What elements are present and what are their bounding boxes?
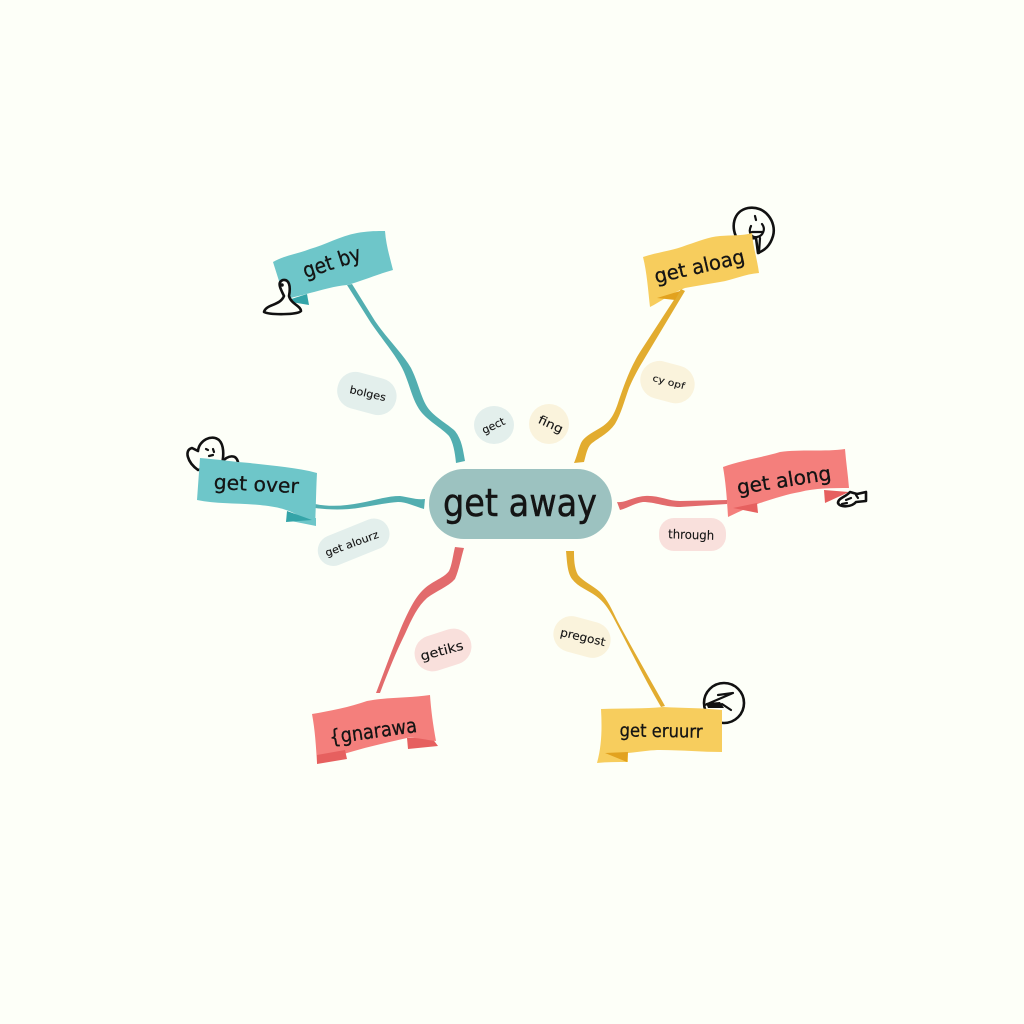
- bubble: bolges: [333, 368, 401, 419]
- connector: get along to centre: [617, 496, 727, 510]
- bubble: cy opf: [636, 357, 699, 408]
- banner: get aloag: get aloag: [652, 244, 747, 288]
- bubble: getiks: [410, 624, 476, 676]
- bubble: bolges: bolges: [348, 384, 387, 404]
- banner: get aloag: [643, 233, 759, 307]
- icon: ghost behind get over: [187, 438, 238, 470]
- bubble: through: [659, 518, 726, 551]
- banner: get along: [723, 449, 849, 517]
- icon: face behind get aloag: [734, 208, 774, 253]
- bubble: gect: [474, 406, 514, 444]
- banner: get along: get along: [735, 461, 833, 499]
- bubble: getiks: getiks: [419, 639, 466, 665]
- bubble: through: through: [668, 526, 714, 543]
- connector: get over to centre: [315, 496, 425, 510]
- centre node: [429, 469, 612, 539]
- connector: bottom right banner to centre: [566, 551, 665, 707]
- bubble: fing: fing: [536, 413, 565, 436]
- connector: get aloag to centre: [574, 289, 685, 463]
- bubble: fing: [529, 404, 569, 444]
- banner: get by: [273, 231, 393, 305]
- banner: get by: get by: [300, 242, 364, 283]
- bubble: get alourz: get alourz: [324, 529, 381, 559]
- banner: bottom right: get eruurr: [619, 720, 703, 743]
- centre node: get away: [443, 481, 597, 525]
- banner: bottom left: {gnarawa: [328, 713, 418, 749]
- icon: hand beside get along: [838, 492, 866, 506]
- icon: arrow circle behind bottom right banner: [704, 683, 744, 723]
- bubble: pregost: pregost: [559, 625, 607, 649]
- bubble: get alourz: [313, 514, 394, 571]
- bubble: pregost: [549, 612, 615, 662]
- banner: get over: [197, 458, 317, 526]
- connector: get by to centre: [347, 284, 465, 463]
- banner: get over: get over: [213, 470, 300, 498]
- bubble: gect: gect: [480, 415, 508, 437]
- icon: figure on get by: [264, 280, 301, 314]
- connector: bottom left banner to centre: [376, 547, 464, 693]
- banner: bottom left: [312, 695, 438, 764]
- bubble: cy opf: cy opf: [651, 374, 687, 392]
- banner: bottom right: [597, 707, 722, 763]
